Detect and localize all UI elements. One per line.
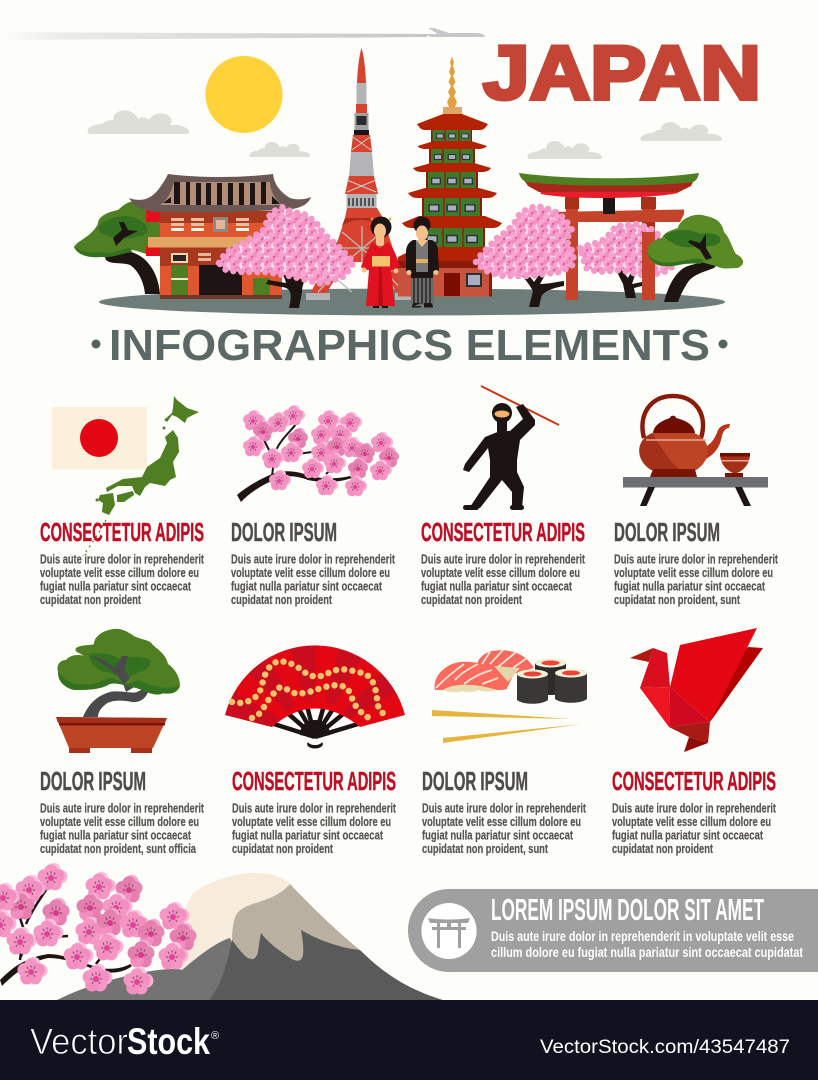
icon: ninja bbox=[463, 386, 559, 510]
text block: voluptate velit esse cillum dolore eu bbox=[422, 814, 581, 829]
text block: fugiat nulla pariatur sint occaecat bbox=[40, 579, 192, 594]
icon: bonsai tree bbox=[56, 629, 180, 753]
text block bbox=[232, 801, 397, 856]
text block: voluptate velit esse cillum dolore eu bbox=[421, 565, 580, 580]
banner text bbox=[491, 929, 803, 960]
clouds bbox=[88, 110, 722, 159]
icon: origami crane bbox=[630, 628, 763, 752]
tree: cherry center-left bbox=[219, 207, 354, 308]
tree: right pine bbox=[648, 215, 743, 302]
ground bbox=[99, 288, 725, 316]
heading: CONSECTETUR ADIPIS bbox=[40, 517, 204, 547]
panel: tea set bbox=[614, 396, 779, 607]
illustration: mount Fuji bbox=[57, 873, 443, 1000]
logo: ® bbox=[211, 1030, 219, 1042]
landmark: pagoda bbox=[398, 57, 502, 296]
panel: cherry branch bbox=[231, 405, 399, 607]
icon: teapot on table bbox=[623, 396, 768, 506]
text block: cupidatat non proident, sunt bbox=[422, 841, 549, 856]
panel: bonsai bbox=[40, 629, 205, 856]
text block: Duis aute irure dolor in reprehenderit bbox=[231, 551, 396, 566]
text block: fugiat nulla pariatur sint occaecat bbox=[614, 579, 766, 594]
figure: man in hakama bbox=[406, 216, 439, 308]
panel: ninja bbox=[421, 386, 586, 607]
text block bbox=[40, 801, 205, 856]
text block: fugiat nulla pariatur sint occaecat bbox=[612, 828, 764, 842]
landmark: Tokyo tower bbox=[306, 48, 412, 300]
icon: folding fan bbox=[225, 645, 405, 748]
text block: fugiat nulla pariatur sint occaecat bbox=[40, 828, 192, 842]
text block: fugiat nulla pariatur sint occaecat bbox=[422, 828, 574, 842]
icon: map of japan bbox=[83, 396, 199, 556]
tree: cherry center-right bbox=[476, 207, 574, 307]
text block: voluptate velit esse cillum dolore eu bbox=[232, 814, 391, 829]
text block bbox=[612, 801, 777, 856]
text block: voluptate velit esse cillum dolore eu bbox=[40, 814, 199, 829]
heading: infographics elements: INFOGRAPHICS ELEMENTS bbox=[109, 322, 710, 370]
heading: CONSECTETUR ADIPIS bbox=[232, 766, 396, 796]
heading: DOLOR IPSUM bbox=[614, 517, 720, 547]
stock id: VectorStock.com/43547487 bbox=[540, 1037, 790, 1058]
text block: cupidatat non proident bbox=[40, 592, 142, 607]
tree: cherry behind torii bbox=[580, 224, 674, 298]
figure: woman in kimono bbox=[361, 216, 400, 308]
text block bbox=[40, 551, 205, 607]
text block: voluptate velit esse cillum dolore eu bbox=[40, 565, 199, 580]
text block: cupidatat non proident bbox=[231, 592, 333, 607]
illustration: landmarks scene bbox=[74, 48, 743, 316]
text block: fugiat nulla pariatur sint occaecat bbox=[421, 579, 573, 594]
panel: origami crane bbox=[612, 628, 777, 856]
heading: DOLOR IPSUM bbox=[40, 766, 146, 796]
text block: cupidatat non proident, sunt officia bbox=[40, 841, 197, 856]
logo: Vector bbox=[30, 1021, 128, 1062]
building: temple bbox=[129, 174, 311, 299]
text block bbox=[614, 551, 779, 607]
logo bbox=[30, 1021, 219, 1062]
icon: sushi and chopsticks bbox=[432, 650, 587, 743]
text block: cupidatat non proident bbox=[612, 841, 714, 856]
panel: sushi bbox=[422, 650, 587, 856]
text block: Duis aute irure dolor in reprehenderit bbox=[40, 801, 205, 816]
icon: cherry blossom branch bbox=[237, 405, 399, 502]
text block: fugiat nulla pariatur sint occaecat bbox=[231, 579, 383, 594]
callout: lorem ipsum banner bbox=[408, 889, 818, 972]
icon: torii in circle bbox=[421, 903, 477, 959]
panel: fan bbox=[225, 645, 405, 856]
text block: voluptate velit esse cillum dolore eu bbox=[231, 565, 390, 580]
text block: Duis aute irure dolor in reprehenderit bbox=[232, 801, 397, 816]
heading: CONSECTETUR ADIPIS bbox=[421, 517, 585, 547]
text block: Duis aute irure dolor in reprehenderit bbox=[422, 801, 587, 816]
logo: Stock bbox=[127, 1021, 210, 1062]
heading: DOLOR IPSUM bbox=[231, 517, 337, 547]
text block: cupidatat non proident bbox=[232, 841, 334, 856]
text block: cupidatat non proident bbox=[421, 592, 523, 607]
landmark: torii gate bbox=[519, 173, 699, 300]
icon: japanese flag bbox=[52, 407, 147, 470]
text block bbox=[231, 551, 396, 607]
footer bar bbox=[0, 1000, 818, 1080]
heading: DOLOR IPSUM bbox=[422, 766, 528, 796]
text block: Duis aute irure dolor in reprehenderit bbox=[421, 551, 586, 566]
icon: sun bbox=[206, 56, 282, 133]
text block bbox=[421, 551, 586, 607]
title: JAPAN bbox=[483, 31, 761, 116]
airplane with trail bbox=[0, 28, 485, 40]
text block: fugiat nulla pariatur sint occaecat bbox=[232, 828, 384, 842]
tree: left pine bbox=[74, 201, 160, 294]
text block: cupidatat non proident, sunt bbox=[614, 592, 741, 607]
text block bbox=[422, 801, 587, 856]
text block: Duis aute irure dolor in reprehenderit bbox=[40, 551, 205, 566]
illustration: cherry branch bottom-left bbox=[0, 863, 196, 994]
panel: flag and map bbox=[40, 396, 205, 607]
